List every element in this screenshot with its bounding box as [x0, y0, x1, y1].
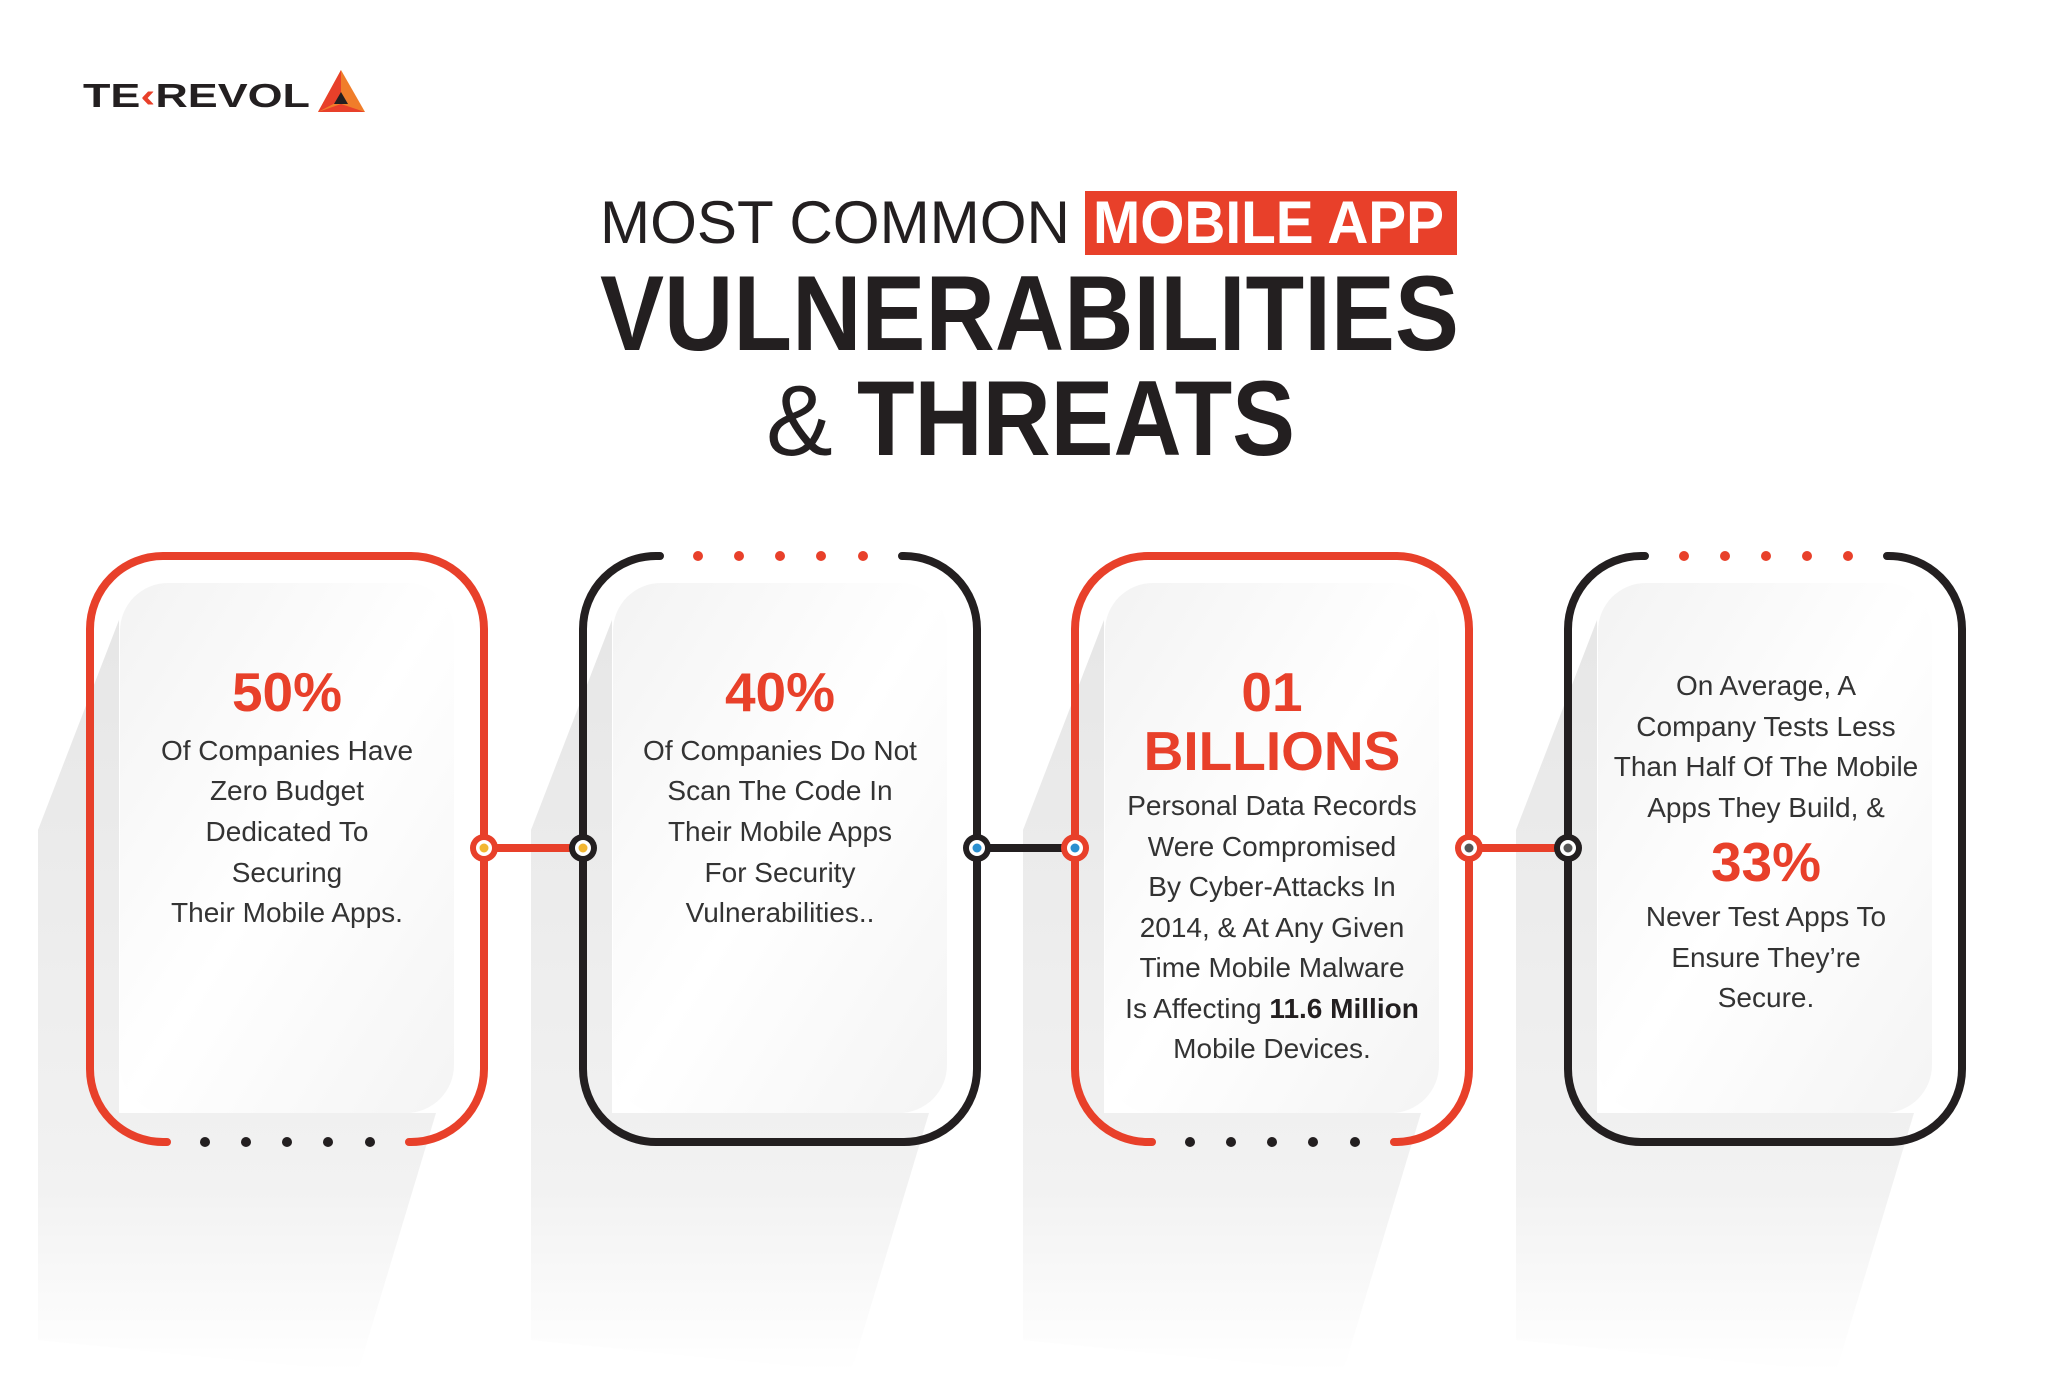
card 3 [1075, 556, 1469, 1147]
logo [83, 70, 365, 114]
card 1: 50% [232, 661, 342, 723]
card 2: 40% [725, 661, 835, 723]
card 4: On Average, A [1676, 670, 1856, 701]
title: THREATS [857, 358, 1295, 478]
card 2 [583, 551, 977, 1142]
card 3: Personal Data Records [1127, 790, 1417, 821]
card 2: Their Mobile Apps [668, 816, 892, 847]
card 2: Of Companies Do Not [643, 735, 917, 766]
card 4: Never Test Apps To [1646, 901, 1886, 932]
card 4: 33% [1711, 831, 1821, 893]
card 1: Securing [232, 857, 342, 888]
shadows [38, 620, 1914, 1372]
card 3: Were Compromised [1148, 831, 1396, 862]
card 4: Company Tests Less [1636, 711, 1896, 742]
card 2: For Security [705, 857, 855, 888]
card 1: Their Mobile Apps. [171, 897, 403, 928]
card 3: 01 [1241, 661, 1303, 723]
card 3: Mobile Devices. [1173, 1033, 1371, 1064]
card 1 [90, 556, 484, 1147]
card 3: BILLIONS [1144, 720, 1400, 782]
title: VULNERABILITIES [600, 253, 1459, 373]
card 3: By Cyber-Attacks In [1148, 871, 1396, 902]
card 4 [1568, 551, 1962, 1142]
card 2: Vulnerabilities.. [686, 897, 874, 928]
title: & [766, 365, 833, 477]
card 2: Scan The Code In [667, 775, 893, 806]
card 4: Than Half Of The Mobile [1614, 751, 1918, 782]
logo: TE ‹REVOL [83, 77, 310, 114]
card 4: Ensure They’re [1671, 942, 1861, 973]
card 3: 2014, & At Any Given [1140, 912, 1404, 943]
connector nodes [470, 834, 1582, 862]
title: MOST COMMON [600, 189, 1070, 256]
card 4: Secure. [1718, 982, 1814, 1013]
card 1: Zero Budget [210, 775, 364, 806]
card 1: Dedicated To [206, 816, 368, 847]
card 4: Apps They Build, & [1647, 792, 1885, 823]
title [600, 189, 1459, 478]
card 3: Is Affecting 11.6 Million [1125, 993, 1419, 1024]
title: MOBILE APP [1093, 189, 1444, 256]
card 3: Time Mobile Malware [1139, 952, 1405, 983]
card 1: Of Companies Have [161, 735, 413, 766]
connectors [484, 844, 1568, 852]
